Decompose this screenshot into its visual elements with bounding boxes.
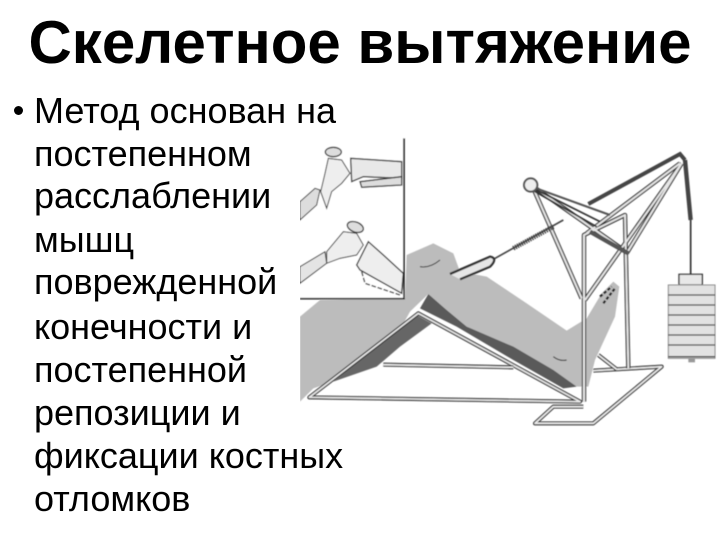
title: Скелетное вытяжение [28,9,692,76]
upright traction stand [533,163,682,402]
illustration: leg on traction frame [300,138,716,426]
text block: method description: мышц [34,219,134,260]
inset: knee detail [300,130,404,299]
text block: method description: постепенной [34,349,247,390]
text block: method description: поврежденной [34,261,277,302]
leg and body [300,243,619,402]
text block: method description [14,90,343,519]
lower frame [309,313,662,423]
text block: method description: постепенном [34,133,252,174]
text block: method description: репозиции и [34,392,241,433]
text block: method description: расслаблении [34,175,271,216]
text block: method description: отломков [34,478,190,519]
text block: method description: конечности и [34,306,252,347]
traction cord and pulleys [524,154,691,275]
text block: method description: Метод основан на [34,90,336,131]
traction wire and pin [450,220,563,279]
bullet [14,106,23,115]
weights [668,274,715,362]
text block: method description: фиксации костных [34,435,343,476]
